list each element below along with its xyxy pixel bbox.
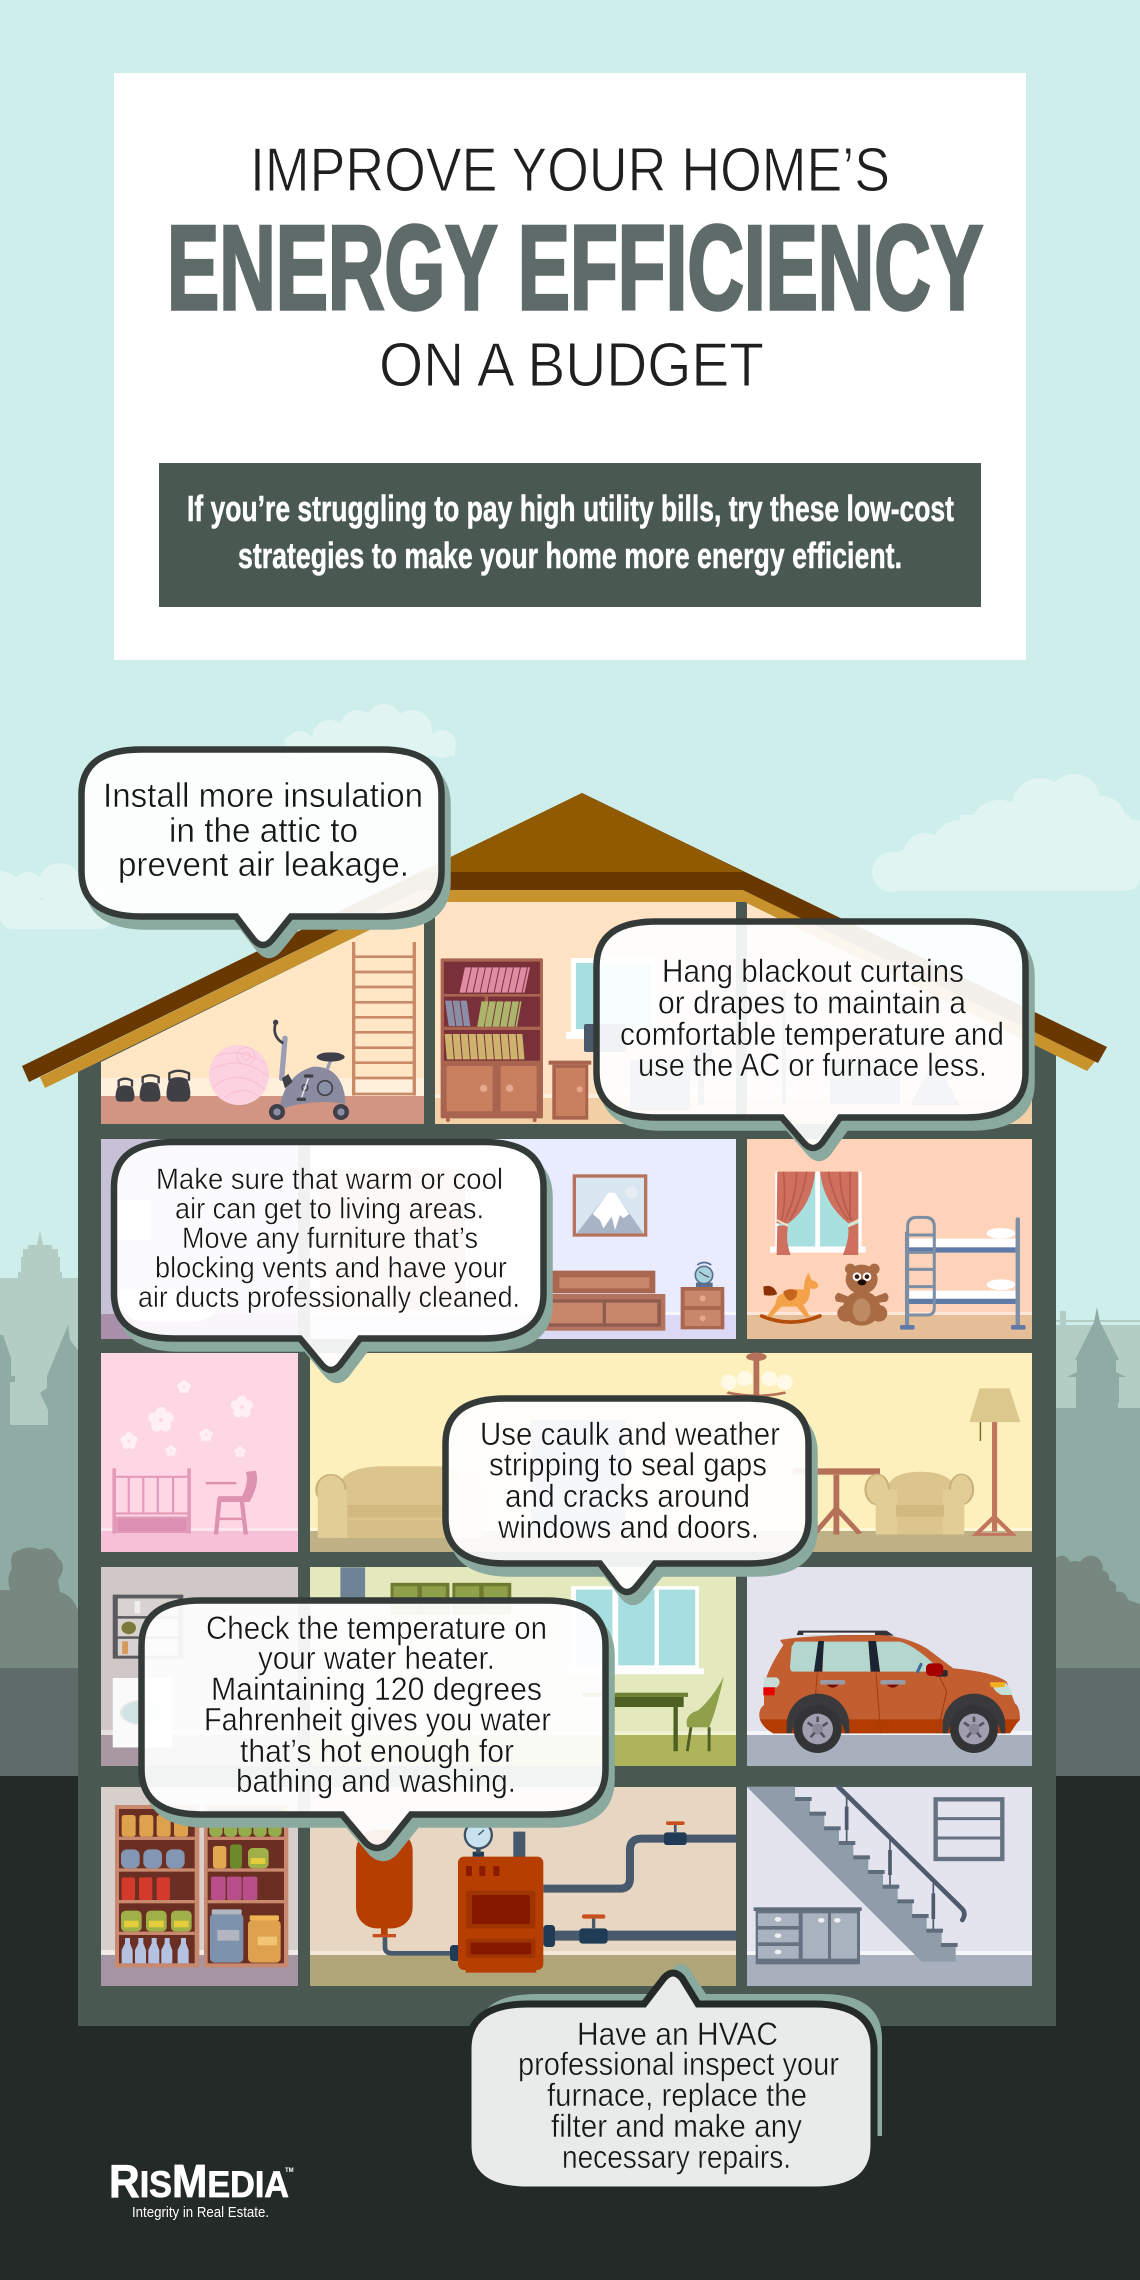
callout: HVAC inspection: professional inspect your (518, 2046, 839, 2082)
bookshelf (441, 958, 543, 1118)
skyline: foreground band (0, 1668, 1140, 1776)
callout: HVAC inspection (468, 1964, 882, 2190)
ground (0, 1776, 1140, 2280)
callout: attic insulation: prevent air leakage. (118, 846, 409, 884)
room: kids bedroom (747, 1139, 1032, 1339)
room: boiler room (310, 1787, 737, 1986)
logo: RISMedia: RISMEDIA (109, 2155, 289, 2207)
study window (566, 958, 662, 1039)
duct (340, 1567, 365, 1599)
dining window (566, 1586, 704, 1674)
house walls (78, 895, 1056, 2026)
room: bathroom behind callout (101, 1139, 298, 1339)
framed picture (573, 1174, 647, 1237)
car (759, 1631, 1020, 1753)
exercise bike (269, 1020, 349, 1120)
divider wall behind callout (736, 902, 747, 1124)
callout: caulk and weather stripping: windows and doors. (497, 1509, 759, 1545)
floor lamp (969, 1388, 1020, 1534)
room: laundry (101, 1567, 298, 1766)
exercise ball (209, 1045, 269, 1105)
left shelf (115, 1805, 199, 1967)
cabinet behind callout (531, 1420, 625, 1534)
callout: blackout curtains: Hang blackout curtains (662, 953, 964, 989)
callout: water heater (142, 1600, 612, 1858)
sofa (316, 1466, 481, 1538)
valves (450, 1821, 687, 1961)
bed (543, 1271, 665, 1331)
nightstand with clock (681, 1262, 724, 1329)
bunk bed (900, 1217, 1026, 1330)
clouds (0, 704, 1140, 929)
callout: air vents: Make sure that warm or cool (156, 1163, 503, 1196)
callout: water heater: bathing and washing. (236, 1763, 516, 1799)
monitor (584, 1024, 626, 1052)
callout: blackout curtains: or drapes to maintain a (658, 984, 966, 1020)
crib (114, 1468, 189, 1534)
high chair (206, 1471, 252, 1534)
intro banner: strategies to make your home more energy efficient. (238, 535, 902, 576)
callout: water heater: Maintaining 120 degrees (211, 1671, 542, 1707)
wall shelves (113, 1595, 183, 1659)
callout: blackout curtains: use the AC or furnace less. (638, 1047, 987, 1083)
room: living room (310, 1353, 1032, 1552)
callout: water heater: your water heater. (258, 1640, 495, 1676)
washing machine (113, 1678, 172, 1747)
room: stairwell (747, 1787, 1032, 1986)
logo: RISMedia: TM (285, 2168, 294, 2174)
room: attic gym (101, 903, 424, 1124)
cabinets (391, 1583, 511, 1614)
room: nursery (101, 1353, 298, 1552)
callout: HVAC inspection: filter and make any (551, 2108, 802, 2144)
roof (22, 793, 1107, 1088)
callout: attic insulation: Install more insulation (103, 777, 423, 815)
dining table (793, 1468, 880, 1534)
armchair (865, 1472, 973, 1534)
furnace (458, 1857, 543, 1973)
dining table and chair (582, 1677, 724, 1751)
cabinet (754, 1907, 862, 1964)
callout: caulk and weather stripping: Use caulk and weather (480, 1416, 780, 1452)
pipes (385, 1832, 737, 1953)
callout: attic insulation (82, 750, 448, 955)
room: dining (310, 1567, 736, 1766)
callout: air vents: Move any furniture that’s (182, 1222, 478, 1255)
callout: HVAC inspection: Have an HVAC (577, 2016, 778, 2052)
callout: blackout curtains: comfortable temperature and (620, 1016, 1004, 1052)
skyline: trees (0, 1548, 1140, 1668)
callout: water heater: Fahrenheit gives you water (204, 1702, 551, 1738)
callout: air vents (114, 1142, 550, 1380)
wall shelf (936, 1799, 1002, 1859)
window with curtains (770, 1172, 866, 1255)
kettlebells (116, 1077, 190, 1102)
callout: air vents: air ducts professionally cleaned. (138, 1281, 520, 1314)
intro banner (159, 463, 981, 607)
callout: blackout curtains (596, 922, 1032, 1158)
callout: caulk and weather stripping: and cracks around (505, 1478, 750, 1514)
room: garage (747, 1567, 1032, 1766)
handrail (838, 1787, 964, 1929)
callout: air vents: air can get to living areas. (175, 1192, 484, 1226)
heading line: on a budget: ON A BUDGET (379, 331, 764, 400)
callout: air vents: blocking vents and have your (155, 1252, 507, 1284)
ladder (354, 942, 414, 1096)
room: pantry (101, 1787, 298, 1986)
callout: HVAC inspection: furnace, replace the (547, 2077, 807, 2113)
right shelf (204, 1805, 288, 1967)
desk, chair and stand behind callout (630, 990, 960, 1110)
title panel (114, 73, 1026, 660)
teddy bear (835, 1264, 888, 1326)
room: attic study (435, 902, 1032, 1124)
skyline: railing highlights (10, 1403, 1140, 1425)
chandelier (721, 1353, 793, 1403)
house (78, 895, 1056, 2026)
skyline: mid layer with towers (0, 1307, 1140, 1678)
callout: caulk and weather stripping: stripping to seal gaps (489, 1446, 767, 1482)
callout: water heater: that’s hot enough for (240, 1733, 514, 1769)
callout: attic insulation: in the attic to (169, 812, 358, 850)
heading line: improve your home's: IMPROVE YOUR HOME’S (250, 136, 890, 205)
callout: water heater: Check the temperature on (206, 1610, 547, 1646)
room: bedroom (298, 1139, 736, 1339)
callout: caulk and weather stripping (446, 1398, 814, 1602)
skyline: far layer left and right (0, 1231, 1140, 1430)
rocking horse (762, 1273, 820, 1322)
callout: HVAC inspection: necessary repairs. (562, 2139, 791, 2175)
gauge (464, 1820, 493, 1857)
nightstand (549, 1061, 591, 1065)
wallpaper flowers (120, 1380, 253, 1457)
expansion tank (356, 1830, 413, 1937)
staircase (747, 1787, 958, 1962)
logo: RISMedia: Integrity in Real Estate. (132, 2204, 269, 2221)
